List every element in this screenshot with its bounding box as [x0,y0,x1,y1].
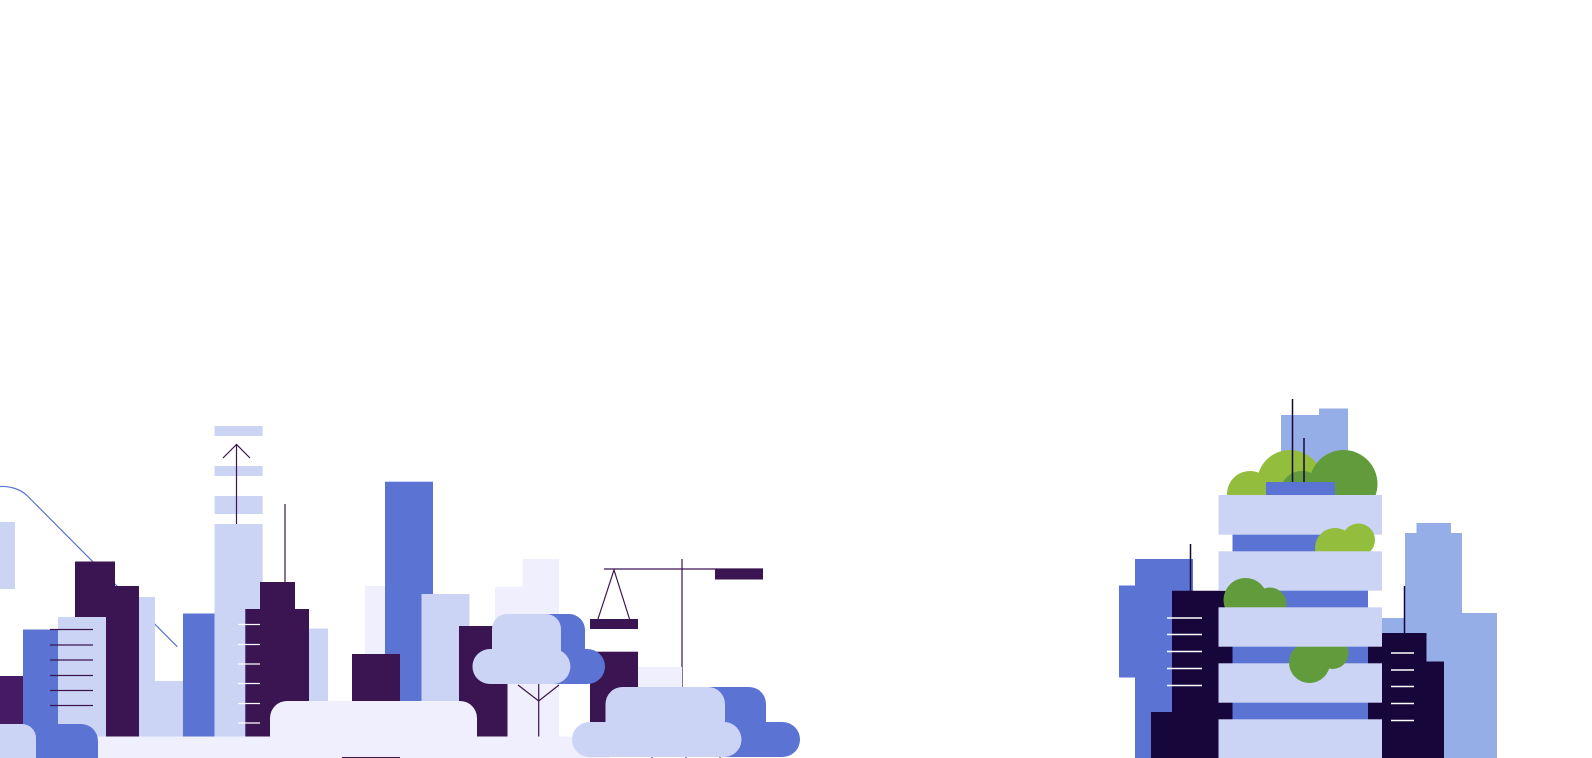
building: faint block [365,586,387,706]
tree trunk and branches [518,684,559,736]
building: light stepped block [139,597,183,737]
building: faint block beside crane [638,667,682,737]
building: faint stepped block [495,559,559,737]
panel: right skyline [1119,399,1497,758]
panel: middle skyline [352,482,763,737]
cloud tree: blue [472,614,605,684]
building: dark stepped tower [75,562,139,737]
building: right dark tower [1368,586,1444,758]
core tower: blue [1232,530,1368,758]
building: light block behind dark tower [309,628,328,738]
building: dark block [459,626,508,737]
building: dark low block [352,654,400,714]
roof block [1266,482,1335,496]
bush: light green second tier [1315,524,1375,568]
cloud tree: light foreground [572,687,742,757]
ground band [90,736,610,758]
building: left blue stepped [1119,559,1193,758]
icon: up arrow antenna [223,444,250,524]
curved cable line [0,486,177,647]
bush: dark green third tier [1224,578,1286,622]
floor slab 3 [1218,607,1382,647]
floor slab 1 [1218,495,1382,535]
building: dark tower with antenna [245,504,309,737]
window ticks: white [238,624,260,723]
building: light block [422,594,470,724]
building: blue block [23,630,58,738]
floor slab 4 [1218,663,1382,703]
window ticks: left white [1167,618,1202,686]
light building at far left [0,522,15,589]
bush: dark green fourth tier [1289,637,1348,683]
building: purple bottom left [0,676,23,758]
dark ground strip [342,757,400,758]
building: left dark tower [1151,544,1232,758]
building: faint block [508,690,559,737]
building: right light blue stepped [1382,523,1497,758]
building: light tower with floating bars [214,426,263,737]
crane [590,559,763,690]
cloud: faint ground hill [270,701,477,737]
floor slab 2 [1218,551,1382,591]
floor slab 5 [1218,719,1382,758]
building: blue column [183,614,215,738]
building: dark block below crane [590,652,638,737]
cloud: blue bottom left [0,724,98,758]
window ticks: purple [50,630,93,706]
window ticks: right white [1391,653,1414,720]
cloud: light bottom left [0,724,36,758]
bushes: top [1227,450,1378,518]
building: light block [58,617,106,737]
antennas: top [1292,399,1304,482]
building: tall blue [385,482,433,722]
building: back light blue tower [1281,408,1348,500]
cloud tree: blue foreground [640,687,800,757]
panel: left skyline [0,426,328,758]
cloud tree: light [472,614,570,684]
crane base ticks [652,756,720,758]
